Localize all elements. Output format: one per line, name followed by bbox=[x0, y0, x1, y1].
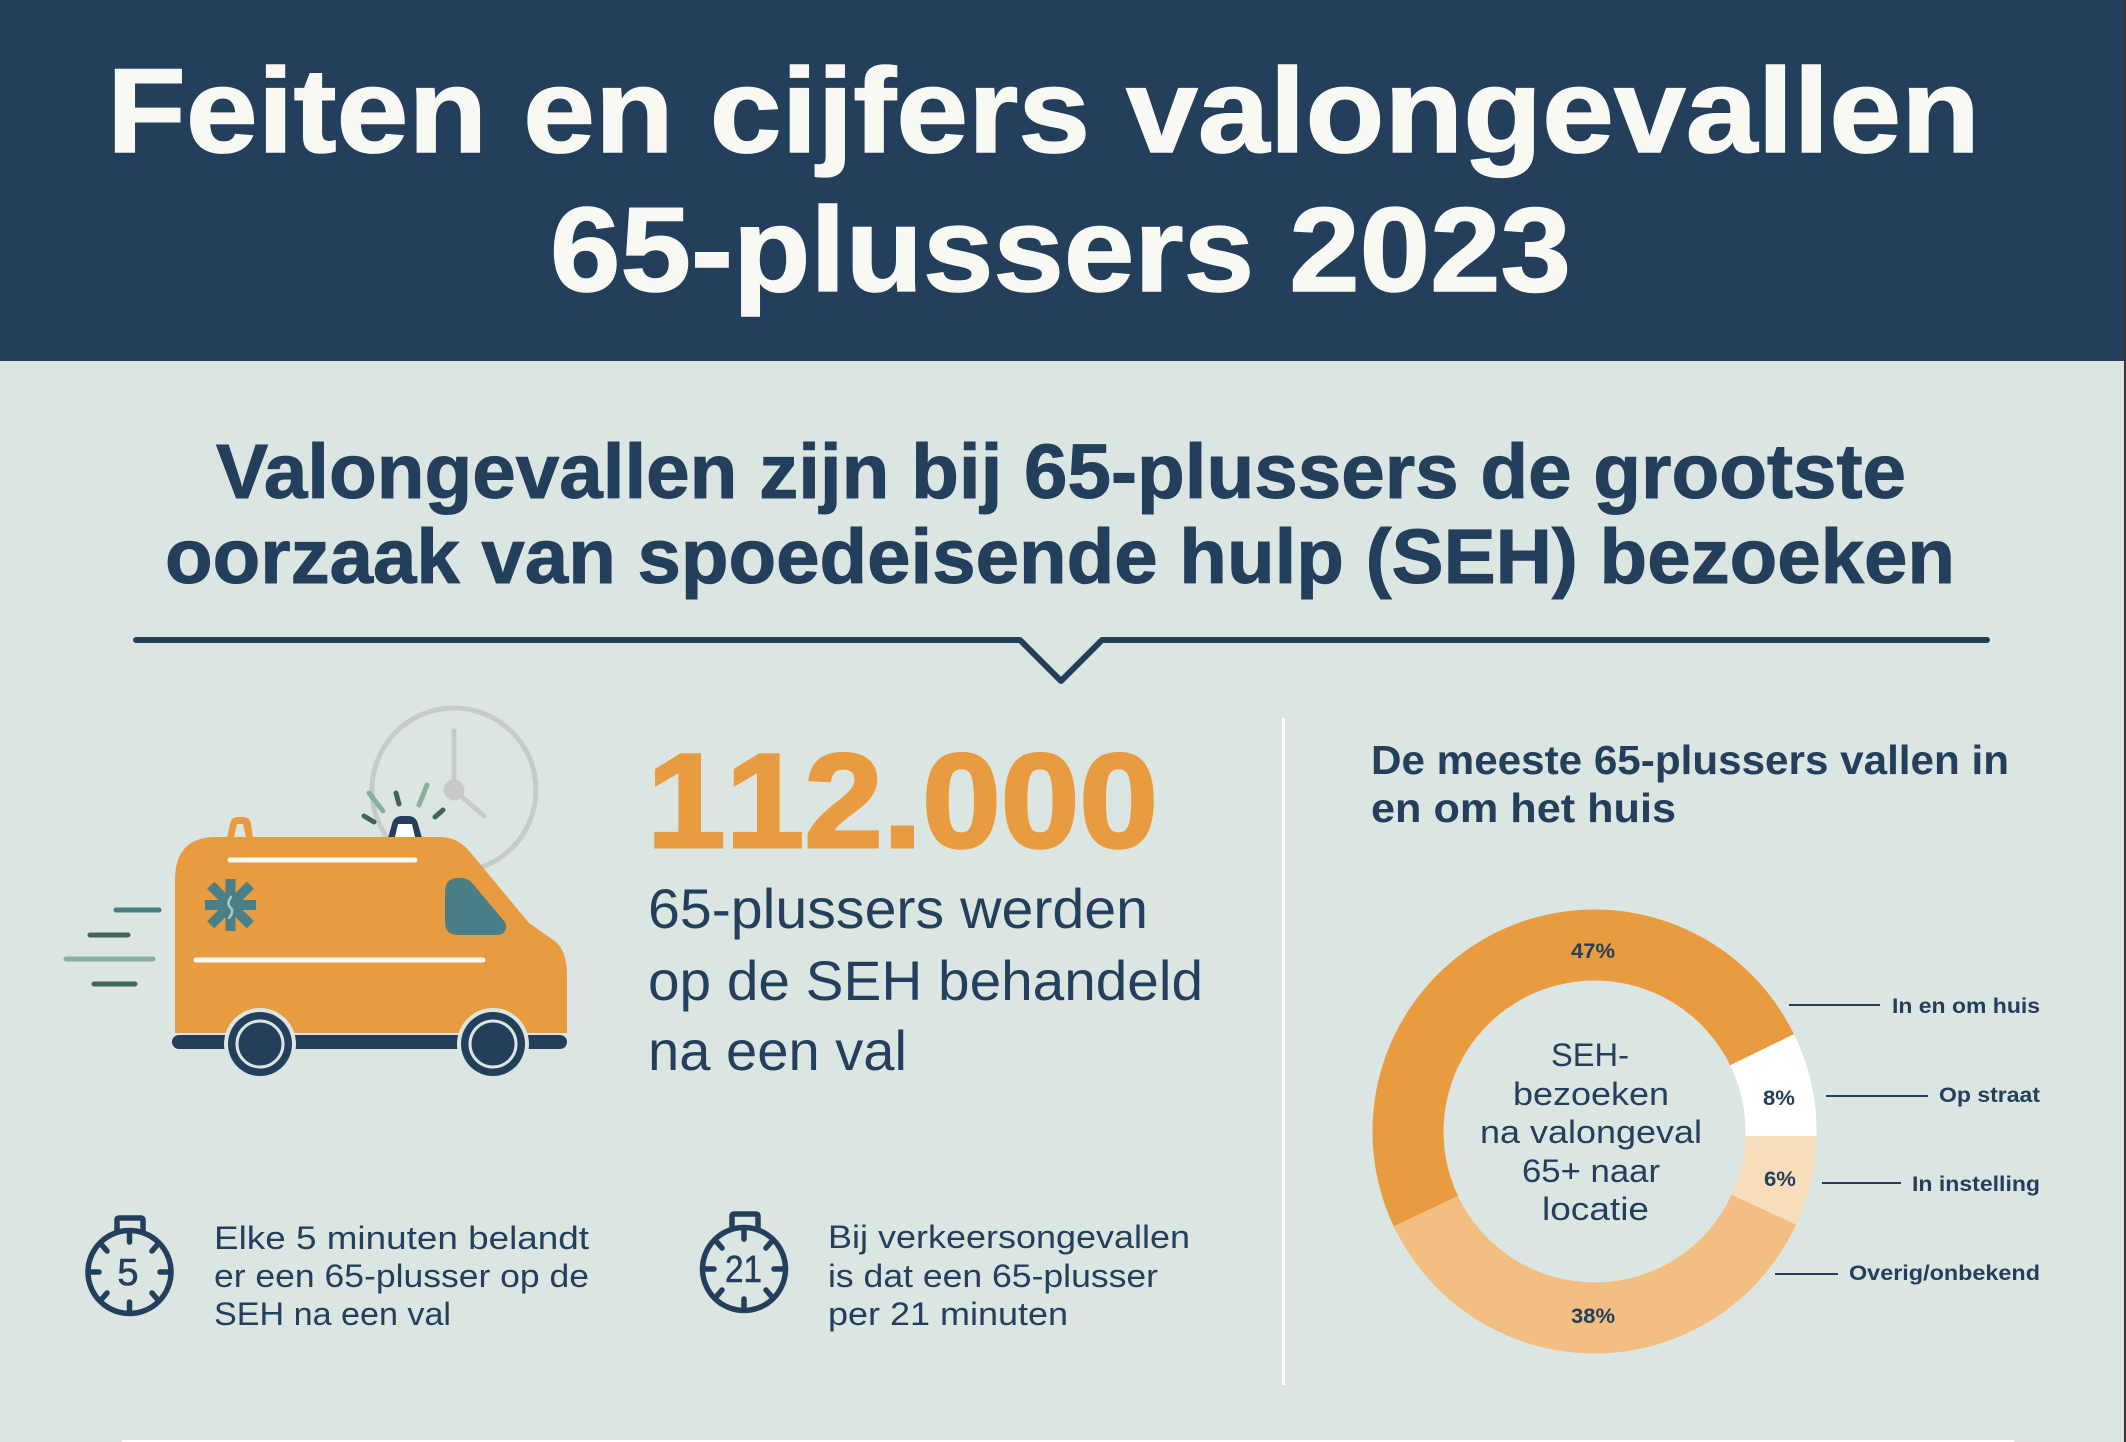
text: description of big number: na een val bbox=[648, 1019, 907, 1082]
text: every 21 minutes bbox=[828, 1219, 1190, 1332]
legend: op straat: Op straat bbox=[1939, 1084, 2040, 1107]
segment: overig 38% bbox=[1394, 1195, 1796, 1353]
centre text: na valongeval bbox=[1480, 1114, 1702, 1150]
speed lines bbox=[66, 910, 159, 984]
text: every 5 minutes bbox=[214, 1220, 589, 1332]
icon: stopwatch 5 bbox=[88, 1218, 171, 1314]
icon: rear wheel bbox=[224, 1008, 296, 1080]
segment: in en om huis 47% bbox=[1372, 910, 1794, 1226]
icon: front wheel bbox=[457, 1008, 529, 1080]
text: every 5 minutes: Elke 5 minuten belandt bbox=[214, 1220, 589, 1256]
chart heading: De meeste 65-plussers vallen in bbox=[1371, 737, 2009, 783]
text: description of big number: op de SEH behandeld bbox=[648, 949, 1203, 1012]
chart heading: en om het huis bbox=[1371, 785, 1676, 831]
subheading: Valongevallen zijn bij 65-plussers de grootste bbox=[216, 429, 1906, 515]
vertical divider bbox=[1282, 718, 1285, 1385]
percentage labels: 47% bbox=[1571, 940, 1615, 963]
icon: siren flashes bbox=[364, 785, 443, 822]
text: description of big number: 65-plussers werden bbox=[648, 877, 1148, 940]
subheading bbox=[165, 429, 1955, 600]
stripes bbox=[196, 860, 483, 960]
icon: window bbox=[445, 878, 506, 935]
icon: stopwatch 5: 5 bbox=[117, 1252, 139, 1294]
centre text bbox=[1480, 1037, 1702, 1227]
segment: op straat 8% bbox=[1730, 1034, 1817, 1136]
centre text: SEH- bbox=[1551, 1037, 1629, 1073]
ambulance body bbox=[175, 837, 567, 1033]
icon: star of life bbox=[205, 879, 256, 931]
centre text: 65+ naar bbox=[1522, 1153, 1660, 1189]
text: every 5 minutes: SEH na een val bbox=[214, 1296, 451, 1332]
legend: in instelling: In instelling bbox=[1912, 1173, 2040, 1196]
icon: stopwatch 21: 21 bbox=[725, 1249, 762, 1291]
percentage labels bbox=[1571, 940, 1796, 1328]
header banner with title bbox=[0, 0, 2124, 361]
icon: stopwatch 21 bbox=[702, 1214, 786, 1310]
legend: in en om huis: In en om huis bbox=[1892, 995, 2040, 1018]
text: every 21 minutes: per 21 minuten bbox=[828, 1296, 1068, 1332]
big number: 112.000 bbox=[647, 727, 1158, 876]
segment: in instelling 6% bbox=[1732, 1136, 1816, 1225]
legend: overig/onbekend: Overig/onbekend bbox=[1849, 1262, 2040, 1285]
centre text: bezoeken bbox=[1513, 1076, 1669, 1112]
chart heading bbox=[1371, 737, 2009, 831]
icon: ambulance with clock bbox=[66, 708, 567, 1080]
undercarriage bbox=[172, 1035, 567, 1049]
percentage labels: 8% bbox=[1763, 1087, 1795, 1110]
text: every 21 minutes: is dat een 65-plusser bbox=[828, 1258, 1158, 1294]
icon: siren bbox=[388, 816, 422, 838]
icon: antenna bbox=[227, 817, 253, 838]
percentage labels: 6% bbox=[1764, 1168, 1796, 1191]
text: every 5 minutes: er een 65-plusser op de bbox=[214, 1258, 589, 1294]
centre text: locatie bbox=[1542, 1191, 1649, 1227]
donut chart bbox=[1372, 910, 1817, 1353]
subheading: oorzaak van spoedeisende hulp (SEH) bezoeken bbox=[165, 514, 1955, 600]
text: every 21 minutes: Bij verkeersongevallen bbox=[828, 1219, 1190, 1255]
header banner with title: Feiten en cijfers valongevallen bbox=[107, 44, 1980, 178]
divider with downward notch bbox=[136, 640, 1987, 681]
percentage labels: 38% bbox=[1571, 1305, 1615, 1328]
icon: clock bbox=[372, 708, 536, 872]
text: description of big number bbox=[648, 877, 1203, 1082]
header banner with title: 65-plussers 2023 bbox=[550, 183, 1571, 317]
